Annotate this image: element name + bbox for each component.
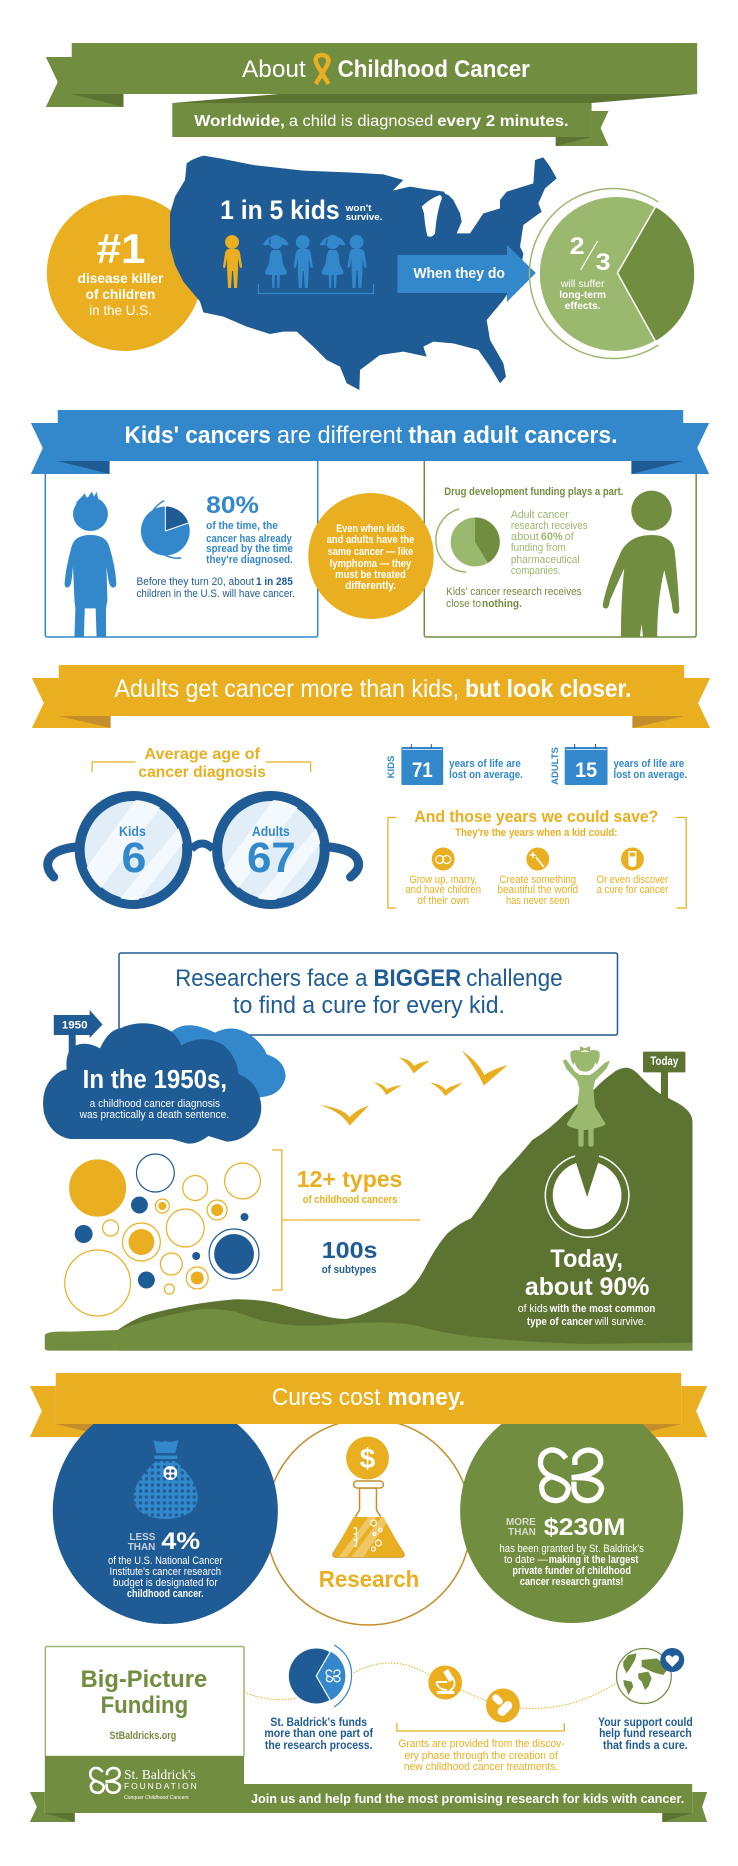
stat: eighty percent text: spread by the time xyxy=(206,543,293,555)
stat: less than four percent: THAN xyxy=(128,1542,155,1553)
stat: eighty percent text xyxy=(206,492,293,566)
stat: more than 230 million xyxy=(499,1514,644,1588)
panel: big-picture funding card: Big-Picture xyxy=(81,1666,207,1693)
stat: one in five kids: won't xyxy=(345,203,372,214)
pie chart: two thirds long-term effects: 2 xyxy=(570,233,585,260)
heading text: are different xyxy=(277,422,403,449)
stat: today about ninety percent: about 90% xyxy=(525,1273,649,1301)
stat: eighty percent text: cancer has already xyxy=(206,533,293,545)
icon: glasses with ages: 6 xyxy=(122,834,146,882)
heading text: but look closer. xyxy=(465,675,631,703)
icon: boy silhouette xyxy=(65,492,116,637)
footer ribbon xyxy=(30,1784,707,1822)
pie chart: sixty percent xyxy=(436,509,500,572)
heading ribbon: cures cost money: money. xyxy=(387,1384,465,1411)
heading box: researchers challenge: Researchers face a xyxy=(175,965,368,992)
cloud: in the 1950s: In the 1950s, xyxy=(83,1066,227,1094)
text: adult research funding: 60% xyxy=(541,531,563,543)
text: one in 285: children in the U.S. will have cancer. xyxy=(136,588,295,600)
icon: glasses with ages: Adults xyxy=(252,824,290,839)
label: research: Research xyxy=(319,1566,419,1592)
panel: big-picture funding card: Funding xyxy=(101,1692,188,1719)
text: adult research funding: research receives xyxy=(511,520,588,532)
stat: kids years lost: lost on average. xyxy=(449,769,523,781)
panel: years we could save: They're the years when a kid could: xyxy=(455,827,617,839)
text: create something xyxy=(497,874,578,907)
icon: money bag xyxy=(133,1440,198,1519)
pie chart: two thirds long-term effects: 3 xyxy=(596,249,611,276)
text: adult research funding: about xyxy=(511,531,539,543)
heading: average age: Average age of xyxy=(144,746,261,763)
heading: average age: cancer diagnosis xyxy=(138,764,266,781)
heading box: researchers challenge xyxy=(119,953,617,1035)
text: grants provided xyxy=(397,1723,565,1773)
text: create something: beautiful the world xyxy=(497,884,578,896)
text: kids research funding: nothing. xyxy=(482,598,522,610)
stat: more than 230 million: has been granted by St. Baldrick's xyxy=(499,1543,644,1555)
icon: pie with SB logo xyxy=(289,1645,352,1707)
heading text: Kids' cancers xyxy=(124,422,271,449)
text: one in 285: Before they turn 20, about xyxy=(136,576,254,588)
text: one in 285 xyxy=(136,576,295,600)
dotted path xyxy=(244,1663,617,1708)
icon: microscope xyxy=(428,1666,462,1700)
panel: kids xyxy=(45,450,318,637)
heading ribbon: look closer xyxy=(32,665,710,728)
text: grow up: of their own xyxy=(417,895,469,907)
subtitle text: Worldwide, xyxy=(194,113,285,130)
text: kids research funding: close to xyxy=(446,598,481,610)
logo: St. Baldrick's Foundation xyxy=(90,1767,197,1801)
stat: adults years lost: 15 xyxy=(575,759,597,782)
text: one in 285: 1 in 285 xyxy=(256,576,293,588)
stat: eighty percent text: 80% xyxy=(206,492,259,519)
arrow: when they do: When they do xyxy=(413,265,505,282)
stat: today about ninety percent: will survive. xyxy=(594,1316,646,1328)
map: United States xyxy=(170,156,557,390)
text: your support: help fund research xyxy=(599,1728,692,1740)
stat: one in five kids: 1 in 5 kids xyxy=(220,195,340,225)
stat: adults years lost: lost on average. xyxy=(614,769,687,781)
text: adult research funding: Adult cancer xyxy=(511,509,569,521)
cloud: in the 1950s: a childhood cancer diagnosis xyxy=(90,1098,221,1110)
pie chart: two thirds long-term effects: long-term xyxy=(559,290,606,301)
logo: St. Baldrick's Foundation: FOUNDATION xyxy=(124,1781,197,1791)
callout: number one disease killer xyxy=(47,195,202,351)
title text: Childhood Cancer xyxy=(338,56,530,83)
text: grants provided: ery phase through the creation of xyxy=(404,1750,559,1762)
callout: same cancer treated differently xyxy=(308,493,434,619)
text: kids research funding: Kids' cancer research receives xyxy=(446,586,582,598)
section: bigger challenge xyxy=(43,953,692,1351)
stat: types and subtypes: 12+ types xyxy=(297,1166,402,1192)
stat: one in five kids: survive. xyxy=(346,212,382,223)
stat: today about ninety percent: with the most common xyxy=(549,1303,656,1315)
panel: adults xyxy=(424,450,696,637)
callout: number one disease killer: in the U.S. xyxy=(89,303,152,318)
subtitle ribbon xyxy=(172,103,609,146)
text: funds more than one part: more than one part of xyxy=(264,1728,373,1740)
panel: research circle xyxy=(266,1419,471,1625)
heading: drug funding: Drug development funding plays a part. xyxy=(444,486,623,498)
heading text: Adults get cancer more than kids, xyxy=(115,675,459,703)
subtitle text: every 2 minutes. xyxy=(437,113,569,130)
panel: big-picture funding card: StBaldricks.org xyxy=(110,1730,176,1742)
text: discover a cure xyxy=(597,874,669,896)
text: adult research funding: funding from xyxy=(511,542,566,554)
icon: wedding rings xyxy=(432,848,455,870)
icon: glasses with ages xyxy=(48,795,359,905)
stat: more than 230 million: making it the largest xyxy=(549,1554,639,1566)
heading: average age xyxy=(92,746,311,781)
stat: more than 230 million: cancer research grants! xyxy=(520,1576,623,1588)
icon: flying birds xyxy=(319,1051,508,1126)
section: adults get cancer more xyxy=(32,665,710,908)
stat: kids years lost: 71 xyxy=(412,759,433,782)
pie chart: eighty percent xyxy=(141,500,190,558)
icon: flask xyxy=(333,1481,404,1557)
illustration: mountain xyxy=(45,1052,692,1351)
panel: four percent circle xyxy=(53,1398,278,1624)
panel: 230 million circle xyxy=(460,1399,683,1623)
heading box: researchers challenge: BIGGER xyxy=(373,965,461,992)
title text: About xyxy=(242,56,306,83)
logo: St. Baldrick's Foundation: St. Baldrick's xyxy=(124,1767,196,1782)
text: adult research funding: companies. xyxy=(511,565,561,577)
callout: same cancer treated differently: Even when kids xyxy=(336,523,405,535)
logo: St. Baldrick's Foundation: Conquer Childhood Cancers xyxy=(124,1795,189,1801)
stat: today about ninety percent: type of cancer xyxy=(527,1316,593,1328)
section: kids versus adult cancers xyxy=(31,410,709,637)
callout: same cancer treated differently: differently. xyxy=(345,580,396,592)
stat: less than four percent: of the U.S. National Cancer xyxy=(108,1555,223,1567)
text: adult research funding xyxy=(511,509,588,577)
text: your support: that finds a cure. xyxy=(603,1740,688,1752)
icon: glasses with ages: 67 xyxy=(247,834,296,882)
stat: adults years lost: years of life are xyxy=(614,758,684,770)
icon: girl on summit xyxy=(563,1046,610,1147)
stat: types and subtypes: of subtypes xyxy=(322,1264,376,1276)
icon: glasses with ages: Kids xyxy=(119,824,146,839)
subtitle text: a child is diagnosed xyxy=(289,113,433,130)
text: grants provided: Grants are provided from the discov- xyxy=(398,1738,565,1750)
panel: years we could save xyxy=(388,808,686,908)
text: discover a cure: Or even discover xyxy=(597,874,669,886)
text: adult research funding: of xyxy=(565,531,575,543)
heading box: researchers challenge: challenge xyxy=(466,965,563,992)
stat: less than four percent: 4% xyxy=(161,1528,200,1555)
cloud: in the 1950s xyxy=(43,1023,286,1144)
stat: eighty percent text: of the time, the xyxy=(206,520,278,532)
callout: number one disease killer: disease killer xyxy=(78,271,164,286)
text: create something: Create something xyxy=(499,874,576,886)
icon: globe with heart xyxy=(616,1648,684,1704)
icon: adult silhouette xyxy=(603,491,679,637)
text: adult research funding: pharmaceutical xyxy=(511,554,580,566)
sign: 1950: 1950 xyxy=(62,1019,88,1032)
callout: same cancer treated differently: and adults have the xyxy=(327,534,414,546)
stat: kids years lost xyxy=(386,744,523,785)
sign: today: Today xyxy=(650,1056,679,1068)
section: big-picture funding xyxy=(30,1645,707,1822)
pie chart: two thirds long-term effects: effects. xyxy=(565,301,601,312)
stat: less than four percent xyxy=(108,1528,223,1600)
stat: more than 230 million: private funder of childhood xyxy=(512,1565,631,1577)
heading box: researchers challenge: to find a cure for every kid. xyxy=(233,992,505,1019)
text: funds more than one part: St. Baldrick's funds xyxy=(270,1717,367,1729)
stat: types and subtypes: 100s xyxy=(322,1237,377,1263)
heading ribbon tails xyxy=(30,1386,707,1437)
stat: types and subtypes xyxy=(272,1150,420,1290)
text: kids research funding xyxy=(446,586,582,610)
icon: awareness ribbon xyxy=(316,55,329,84)
panel: big-picture funding card xyxy=(45,1646,244,1813)
text: your support: Your support could xyxy=(598,1717,693,1729)
stat: kids years lost: KIDS xyxy=(386,756,397,778)
icon: test tube xyxy=(621,848,644,870)
icon: magic wand xyxy=(526,848,549,870)
stat: more than 230 million: to date — xyxy=(504,1554,548,1566)
stat: more than 230 million: $230M xyxy=(544,1514,625,1541)
chart: bubbles of cancer types xyxy=(65,1154,260,1316)
title ribbon xyxy=(46,43,697,107)
text: your support xyxy=(598,1717,693,1752)
stat: today about ninety percent: Today, xyxy=(550,1245,623,1273)
text: grow up: and have children xyxy=(405,884,481,896)
stat: less than four percent: Institute's cancer research xyxy=(110,1566,221,1578)
callout: same cancer treated differently: must be treated xyxy=(335,569,406,581)
stat: adults years lost xyxy=(550,744,687,785)
stat: less than four percent: budget is designated for xyxy=(113,1577,218,1589)
stat: today about ninety percent xyxy=(518,1245,656,1328)
heading ribbon: cures cost money xyxy=(56,1373,681,1424)
text: create something: has never seen xyxy=(506,895,570,907)
callout: number one disease killer: of children xyxy=(86,287,155,302)
pie chart: two thirds long-term effects: will suffer xyxy=(560,279,605,290)
icon: coin with dollar: $ xyxy=(360,1443,376,1474)
callout: same cancer treated differently: lymphoma — they xyxy=(330,558,412,570)
stat: less than four percent: childhood cancer. xyxy=(127,1588,204,1600)
icon: coin with dollar xyxy=(346,1436,389,1480)
icon: SB logo xyxy=(540,1450,602,1501)
icon: pills xyxy=(486,1688,520,1722)
pie chart: ninety percent survive xyxy=(545,1156,629,1237)
text: grants provided: new childhood cancer treatments. xyxy=(404,1761,558,1773)
text: funds more than one part: the research process. xyxy=(265,1740,372,1752)
section: cures cost money xyxy=(30,1373,707,1625)
stat: eighty percent text: they're diagnosed. xyxy=(206,554,293,566)
stat: kids years lost: years of life are xyxy=(449,758,521,770)
text: funds more than one part xyxy=(264,1717,373,1752)
heading text xyxy=(124,422,617,449)
section: about childhood cancer xyxy=(46,43,697,390)
stat: adults years lost: ADULTS xyxy=(550,747,561,785)
stat: types and subtypes: of childhood cancers xyxy=(303,1194,397,1206)
heading text: than adult cancers. xyxy=(408,422,617,449)
callout: same cancer treated differently: same cancer — like xyxy=(328,546,413,558)
stat: today about ninety percent: of kids xyxy=(518,1303,548,1315)
heading ribbon: cures cost money: Cures cost xyxy=(272,1384,381,1411)
stat: less than four percent: LESS xyxy=(129,1532,156,1543)
title text xyxy=(242,56,530,83)
callout: number one disease killer: #1 xyxy=(97,225,145,272)
footer text: Join us and help fund the most promising research for kids with cancer. xyxy=(251,1792,684,1806)
panel: years we could save: And those years we could save? xyxy=(414,808,658,826)
stat: more than 230 million: THAN xyxy=(508,1527,536,1538)
icon: row of five children xyxy=(223,235,373,294)
arrow: when they do xyxy=(397,245,536,302)
cloud: in the 1950s: was practically a death sentence. xyxy=(79,1109,229,1121)
text: discover a cure: a cure for cancer xyxy=(597,884,669,896)
heading ribbon: kids cancers different xyxy=(31,410,709,474)
pie chart: two thirds long-term effects xyxy=(529,189,694,358)
text: grow up xyxy=(405,874,481,907)
text: grow up: Grow up, marry, xyxy=(409,874,477,886)
stat: more than 230 million: MORE xyxy=(506,1517,536,1528)
subtitle text xyxy=(194,113,569,130)
sign: 1950 xyxy=(54,1010,103,1065)
